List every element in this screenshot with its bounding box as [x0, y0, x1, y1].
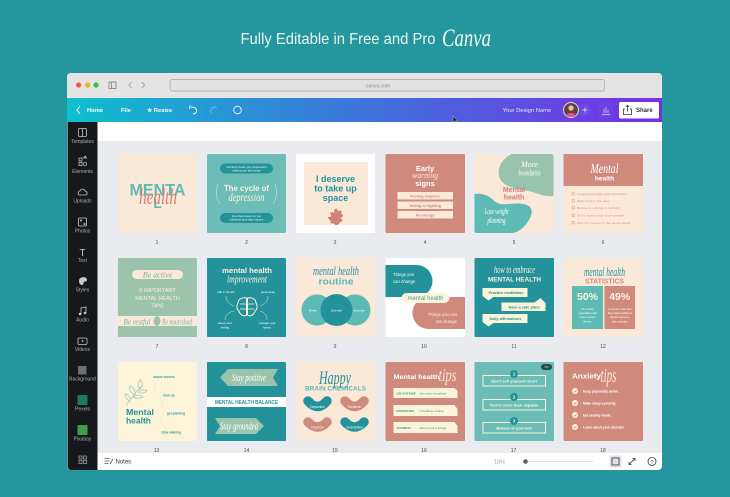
card 6: mental health list: Don't expect much from yourself [577, 214, 624, 218]
icon: background [69, 366, 96, 382]
card 6: mental health list: Mental [590, 162, 619, 177]
card 1: mental health [118, 154, 197, 233]
card 11: how to embrace mental health: how to embrace [494, 265, 535, 276]
card 15: happy brain chemicals: Serotonin [348, 405, 362, 409]
card 5: mental health blobs: health [504, 194, 524, 202]
number 17: 17 [511, 448, 516, 454]
card 1: mental health: health [139, 184, 177, 209]
number 1: 1 [156, 240, 159, 246]
icon: pexels [75, 395, 90, 412]
card 15: happy brain chemicals [296, 362, 375, 441]
card 2: cycle of depression: Inactivity feeds your depression [226, 165, 267, 169]
icon: mouse cursor [453, 116, 458, 124]
card 8: mental health improvement: improvement [227, 274, 267, 286]
icon: brain [237, 298, 257, 316]
card 17: three reminders: Believe in yourself [496, 426, 532, 430]
icon: photos: Photos [75, 228, 91, 234]
icon: leaf branch [125, 380, 147, 406]
icon: notes [104, 458, 113, 464]
icon: videos [75, 338, 91, 353]
number 6: 6 [602, 240, 605, 246]
icon: audio: Audio [76, 318, 89, 324]
card 4: early warning signs: Early [416, 164, 435, 173]
card 2: cycle of depression: withdraw and stay inactive [230, 218, 264, 222]
card 3: i deserve to take up space: I deserve [316, 174, 355, 184]
title: Canva [442, 25, 491, 52]
card 14: mental health balance: Stay positive [232, 372, 266, 384]
card 16: mental health tips: ESTABLISH [396, 409, 415, 413]
card 18: anxiety tips: tips [600, 365, 617, 387]
card 9: mental health routine: Relax [309, 308, 317, 312]
card 2: cycle of depression: Feel depressed so you [232, 214, 262, 218]
card 17: three reminders: You're more than capable [490, 402, 539, 408]
card 6: mental health list: Stop living in the past [577, 199, 609, 203]
card 6: mental health list [564, 154, 643, 233]
card 12: mental health statistics: 49% [609, 291, 631, 303]
card 18: anxiety tips: Make sleep a priority. [583, 402, 616, 406]
icon: pixabay: Pixabay [74, 436, 92, 442]
card 13: nature and mental health: look up [163, 394, 175, 398]
card 12: mental health statistics: see a doctor [612, 320, 628, 324]
browser chrome [67, 73, 662, 98]
number 10: 10 [421, 344, 427, 350]
card 11: how to embrace mental health: Daily affirmations [490, 317, 521, 321]
card 13: nature and mental health: health [126, 416, 151, 426]
icon: help: ? [650, 460, 654, 466]
card 12: mental health statistics: illness [583, 320, 592, 324]
card 17: three reminders: 3 [513, 418, 516, 424]
number 3: 3 [334, 240, 337, 246]
card 6: mental health list: Let go of grudges and resentment [577, 192, 627, 196]
card 5: mental health blobs: Mental [503, 187, 525, 194]
card 7: five important tips: Be active [143, 270, 173, 280]
card 5: mental health blobs: More [520, 160, 538, 169]
card 10: things you can change: can change [393, 279, 416, 284]
card 2: cycle of depression: making you feel worse [232, 168, 261, 172]
card 5: mental health blobs: boundaries [518, 168, 540, 178]
card 8: mental health improvement: share your [218, 321, 232, 325]
card 10: things you can change: not change [436, 319, 458, 324]
card 11: how to embrace mental health [474, 258, 554, 337]
card 17: three reminders: Don't sell yourself short [491, 378, 537, 384]
card 3: i deserve to take up space [296, 154, 375, 233]
icon: more apps [79, 456, 86, 464]
card 10: things you can change: Things you [393, 272, 415, 277]
icon: grid view [610, 456, 622, 468]
card 11: how to embrace mental health: MENTAL HEALTH [488, 276, 541, 284]
card 1: mental health: MENTA [130, 180, 186, 200]
browser chrome: canva.com [366, 83, 390, 89]
card 8: mental health improvement: good sleep [261, 290, 275, 294]
card 2: cycle of depression: depression [228, 190, 264, 204]
avatar [564, 102, 578, 118]
icon: help [648, 458, 656, 466]
card 7: five important tips [118, 258, 197, 337]
menu pill: ••• [544, 364, 549, 369]
icon: styles: Styles [76, 288, 90, 294]
card 8: mental health improvement: manage your [259, 321, 275, 325]
title: Fully Editable in Free and Pro [240, 31, 436, 48]
icon: styles [76, 277, 90, 294]
bottom bar [98, 453, 662, 470]
card 4: early warning signs [386, 154, 465, 233]
card 15: happy brain chemicals: Oxytocin [311, 426, 324, 430]
card 9: mental health routine: routine [318, 276, 354, 286]
share button: Share [636, 108, 653, 114]
card 17: three reminders: 1 [513, 372, 516, 376]
card 5: mental health blobs: Lose weight [484, 207, 509, 216]
editor toolbar: ★ Resize [147, 107, 173, 114]
card 18: anxiety tips: Anxiety [572, 372, 602, 380]
card 5: mental health blobs [474, 154, 554, 233]
card 7: five important tips: TIPS [151, 304, 164, 310]
card 16: mental health tips: GO OUTSIDE [396, 392, 416, 396]
card 18: anxiety tips [564, 362, 643, 441]
number 12: 12 [600, 344, 606, 350]
card 17: three reminders [474, 362, 554, 441]
card 12: mental health statistics: of people who feel [608, 307, 632, 311]
number 15: 15 [332, 448, 338, 454]
card 3: i deserve to take up space: space [323, 193, 348, 203]
icon: text [78, 248, 88, 264]
icon: text: T [79, 248, 86, 259]
card 5: mental health blobs: planning [487, 216, 506, 225]
card 13: nature and mental health: nature sounds [153, 375, 175, 379]
card 11: how to embrace mental health: Practice meditation [488, 291, 524, 295]
card 7: five important tips: 5 IMPORTANT [139, 288, 176, 294]
icon: elements: Elements [72, 169, 93, 175]
card 12: mental health statistics: of world's [581, 307, 594, 311]
card 15: happy brain chemicals: Dopamine [310, 405, 325, 409]
card 4: early warning signs: Feeling helpless [410, 194, 440, 198]
zoom percentage: 18% [494, 460, 505, 466]
notes label: Notes [116, 460, 131, 466]
card 15: happy brain chemicals: Happy [318, 368, 351, 389]
number 8: 8 [245, 344, 248, 350]
card 13: nature and mental health: slow walking [161, 430, 181, 434]
card 14: mental health balance: Stay grounded [220, 420, 258, 432]
card 13: nature and mental health: get planting [167, 412, 185, 416]
card 4: early warning signs: No energy [416, 214, 435, 218]
white top strip [98, 122, 662, 141]
editor toolbar: Home [87, 108, 104, 114]
icon: uploads: Uploads [73, 198, 92, 204]
icon: text: Text [78, 258, 88, 264]
card 8: mental health improvement: talk to friends [217, 290, 235, 294]
icon: uploads [73, 189, 92, 204]
card 2: cycle of depression: The cycle of [224, 184, 269, 193]
card 7: five important tips: Be restful [124, 318, 151, 326]
card 8: mental health improvement: feeling [221, 326, 230, 330]
card 6: mental health list: Refuse to indulge in self pity [577, 206, 620, 210]
card 12: mental health statistics [564, 258, 643, 337]
number 13: 13 [154, 448, 159, 454]
icon: pexels: Pexels [75, 406, 90, 412]
icon: photos [75, 218, 91, 234]
number 11: 11 [511, 344, 517, 350]
card 10: things you can change: mental health [407, 296, 444, 302]
card 4: early warning signs: signs [415, 179, 435, 188]
icon: templates: Templates [71, 139, 94, 145]
editor toolbar [67, 98, 662, 122]
card 4: early warning signs: warning [412, 171, 438, 180]
sidebar [68, 122, 98, 470]
number 2: 2 [245, 240, 248, 246]
card 16: mental health tips: About your feelings [420, 426, 446, 430]
number 18: 18 [600, 448, 606, 454]
card 14: mental health balance: MENTAL HEALTH BALANCE [215, 400, 279, 406]
card 18: anxiety tips: Eat healthy foods. [583, 414, 611, 418]
card 8: mental health improvement: mental health [222, 266, 272, 275]
icon: elements [72, 156, 93, 175]
card 15: happy brain chemicals: Endorphins [346, 426, 363, 430]
icon: background: Background [69, 376, 96, 382]
card 18: anxiety tips: Learn about your disorder. [583, 426, 625, 430]
share button [619, 102, 659, 118]
number 16: 16 [421, 448, 427, 454]
icon: videos: Videos [75, 347, 91, 353]
card 6: mental health list: Staying involve in the doing world [577, 221, 630, 225]
card 8: mental health improvement: stress [263, 326, 271, 330]
card 10: things you can change [386, 258, 465, 337]
card 12: mental health statistics: haven't gone to [610, 315, 630, 319]
editor toolbar: Your Design Name [503, 108, 551, 114]
zoom slider [523, 459, 593, 464]
card 3: i deserve to take up space: to take up [314, 184, 357, 194]
icon: fullscreen [629, 458, 635, 464]
number 5: 5 [513, 240, 516, 246]
editor toolbar: File [121, 108, 132, 114]
card 18: anxiety tips: Keep physically active. [583, 390, 619, 394]
icon: templates [71, 128, 94, 145]
card 7: five important tips: MENTAL HEALTH [135, 296, 180, 302]
card 12: mental health statistics: population will [578, 311, 597, 315]
card 6: mental health list: health [595, 176, 614, 182]
card 15: happy brain chemicals: BRAIN CHEMICALS [305, 386, 366, 392]
number 14: 14 [244, 448, 249, 454]
card 13: nature and mental health [118, 362, 197, 441]
card 16: mental health tips: A bedtime routine [420, 409, 444, 413]
card 9: mental health routine: mental health [313, 263, 359, 278]
card 17: three reminders: 2 [513, 394, 516, 400]
card 12: mental health statistics: 50% [577, 291, 599, 303]
browser window [67, 73, 662, 470]
card 11: how to embrace mental health: Have a safe place [508, 306, 540, 310]
icon: pixabay [74, 425, 92, 442]
card 1: mental health: L [153, 195, 162, 211]
card 16: mental health tips [386, 362, 465, 441]
card 12: mental health statistics: STATISTICS [585, 278, 624, 286]
card 8: mental health improvement [207, 258, 286, 337]
card 16: mental health tips: JOURNAL [396, 426, 412, 430]
card 7: five important tips: Be nourished [162, 318, 193, 326]
card 9: mental health routine [296, 258, 375, 337]
title [240, 25, 491, 52]
card 14: mental health balance [207, 362, 286, 441]
number 7: 7 [156, 344, 159, 350]
card 16: mental health tips: tips [438, 365, 456, 385]
card 13: nature and mental health: Mental [126, 408, 154, 417]
card 9: mental health routine: Exercise [353, 308, 365, 312]
card 12: mental health statistics: they have suffered [608, 311, 632, 315]
number 9: 9 [334, 344, 337, 350]
card 16: mental health tips: Mental health [394, 374, 440, 381]
card 10: things you can change: Things you can [428, 312, 458, 317]
card 4: early warning signs: Yelling or fighting [409, 204, 442, 208]
card 2: cycle of depression [207, 154, 286, 233]
card 12: mental health statistics: have mental [580, 315, 596, 319]
card 16: mental health tips: Get some sunshine [420, 392, 446, 396]
icon: audio [76, 307, 89, 324]
card 12: mental health statistics: mental health [584, 264, 625, 279]
number 4: 4 [424, 240, 427, 246]
card 9: mental health routine: Eat well [331, 308, 342, 312]
